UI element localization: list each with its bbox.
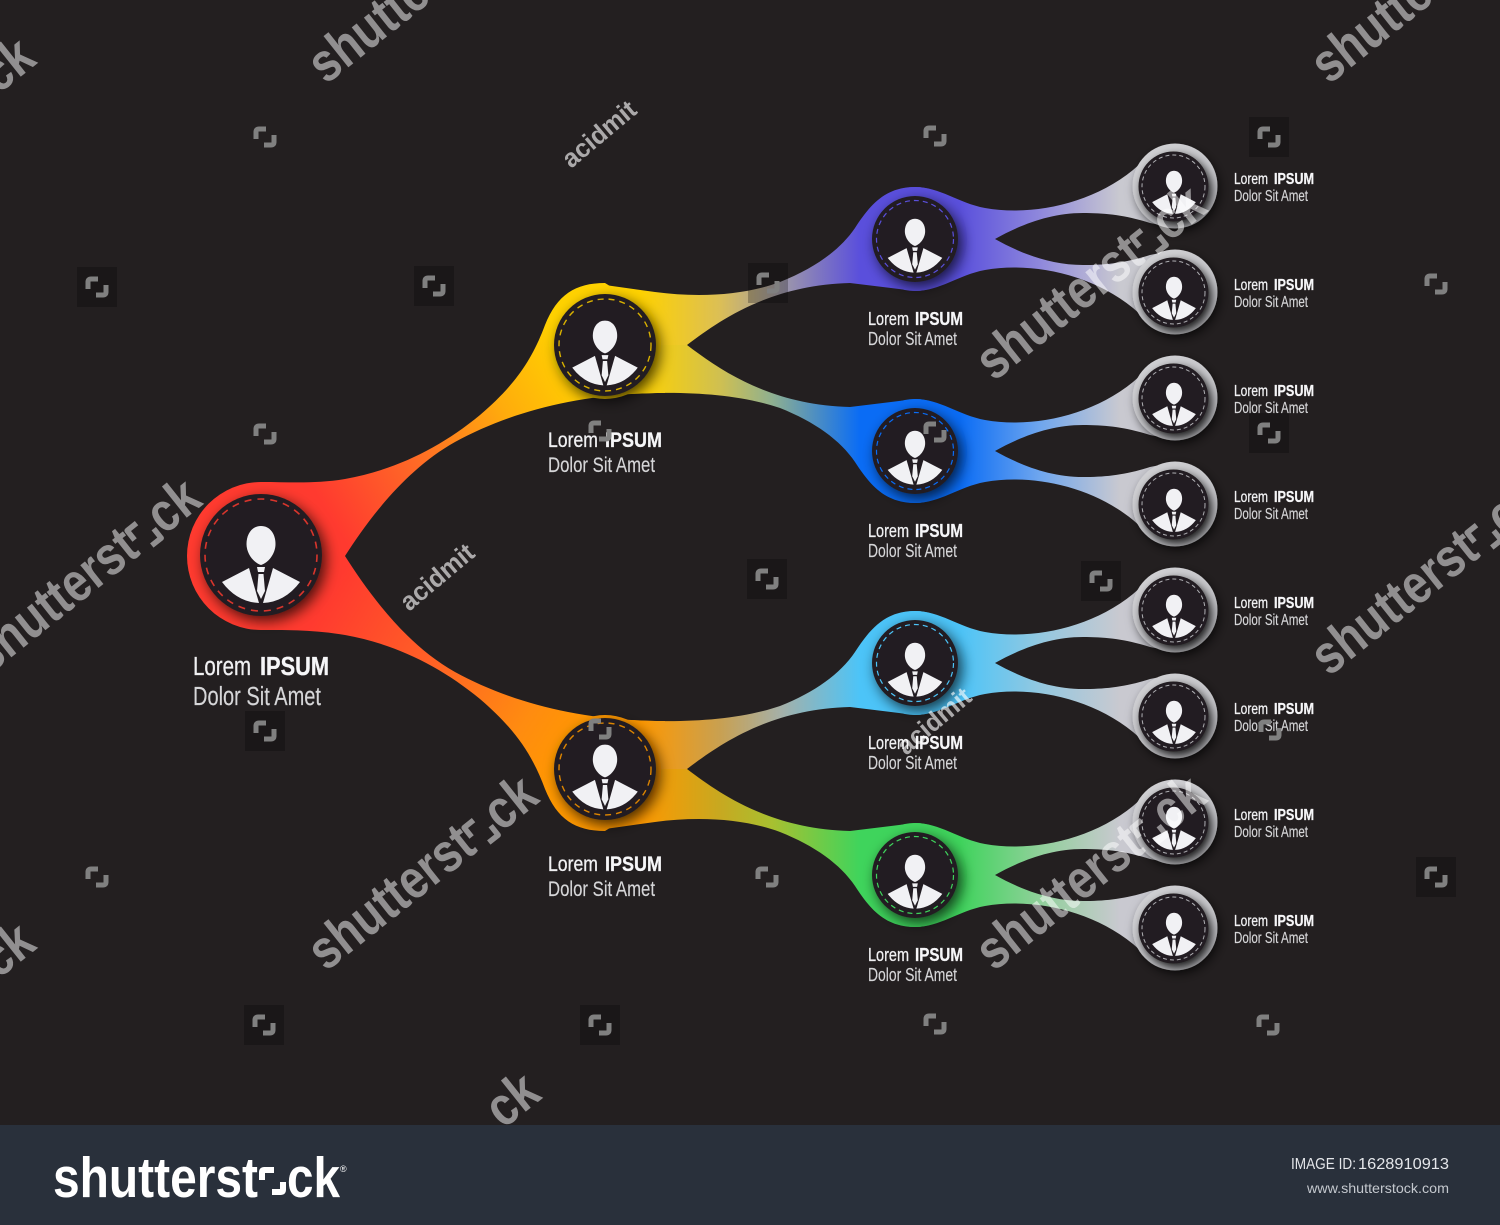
website: www.shutterstock.com	[1306, 1180, 1449, 1196]
leaf label 4: IPSUM	[1274, 489, 1314, 506]
watermark tile marks	[77, 117, 1456, 1045]
connector: purple to lower leaf	[915, 222, 1175, 334]
leaf label 4	[1234, 489, 1314, 523]
light blue label	[868, 732, 963, 773]
orange label	[548, 852, 662, 901]
purple blob	[863, 187, 967, 291]
leaf label 1	[1234, 171, 1314, 205]
watermark: shutterstock upper right: shutterst	[963, 221, 1154, 391]
connector: yellow to purple	[605, 187, 915, 345]
leaf label 2: Lorem	[1234, 277, 1268, 294]
green blob	[863, 823, 967, 927]
green label: Dolor Sit Amet	[868, 964, 957, 985]
connector: orange to light blue	[605, 611, 915, 769]
leaf node 4	[1132, 462, 1218, 546]
watermark: shutterstock lower right: shutterst	[963, 811, 1154, 981]
watermark: shutterstock lower middle: shutterst	[295, 811, 486, 981]
leaf label 5	[1234, 595, 1314, 629]
blue node	[872, 408, 958, 494]
image id: 1628910913	[1358, 1156, 1449, 1173]
yellow label: Lorem	[548, 428, 598, 452]
watermark: shutterstock left: ck	[133, 464, 212, 545]
root label: Lorem	[193, 653, 251, 681]
connector: light blue to upper leaf	[915, 568, 1175, 680]
connector: blue to lower leaf	[915, 434, 1175, 546]
leaf label 7	[1234, 807, 1314, 841]
light blue label: IPSUM	[915, 732, 963, 753]
leaf node 8	[1132, 886, 1218, 970]
leaf node 7	[1132, 780, 1218, 864]
connector: green to lower leaf	[915, 858, 1175, 970]
leaf label 8: Lorem	[1234, 913, 1268, 930]
connector: green to upper leaf	[915, 780, 1175, 892]
root label	[193, 653, 329, 711]
leaf label 1: Lorem	[1234, 171, 1268, 188]
green label: IPSUM	[915, 944, 963, 965]
connector: orange to green	[605, 769, 915, 927]
root label: IPSUM	[260, 653, 329, 681]
purple label: Lorem	[868, 308, 909, 329]
leaf label 6: Lorem	[1234, 701, 1268, 718]
leaf label 7: Dolor Sit Amet	[1234, 824, 1308, 841]
leaf node 3	[1132, 356, 1218, 440]
leaf node 1	[1132, 144, 1218, 228]
blue label	[868, 520, 963, 561]
footer logo: shutterst	[53, 1146, 258, 1210]
leaf label 8: Dolor Sit Amet	[1234, 930, 1308, 947]
leaf node 5	[1132, 568, 1218, 652]
leaf label 1: IPSUM	[1274, 171, 1314, 188]
orange label: Dolor Sit Amet	[548, 877, 655, 901]
yellow node	[554, 294, 656, 396]
leaf label 3: Dolor Sit Amet	[1234, 400, 1308, 417]
blue blob	[863, 399, 967, 503]
yellow blob	[549, 287, 661, 399]
connector: light blue to lower leaf	[915, 646, 1175, 758]
root red blob	[187, 482, 335, 630]
light blue node	[872, 620, 958, 706]
purple node	[872, 196, 958, 282]
watermark: acidmit lower: acidmit	[891, 681, 978, 761]
leaf label 2	[1234, 277, 1314, 311]
leaf label 5: Dolor Sit Amet	[1234, 612, 1308, 629]
leaf label 6	[1234, 701, 1314, 735]
leaf label 1: Dolor Sit Amet	[1234, 188, 1308, 205]
orange label: Lorem	[548, 852, 598, 876]
watermark: acidmit center: acidmit	[394, 537, 481, 617]
yellow label	[548, 428, 662, 477]
watermark: ck bottom: ck	[472, 1058, 551, 1139]
watermark: shutterstock lower right: ck	[1138, 761, 1217, 842]
leaf label 2: IPSUM	[1274, 277, 1314, 294]
connector: root to orange node	[261, 556, 665, 831]
green label	[868, 944, 963, 985]
root label: Dolor Sit Amet	[193, 683, 321, 711]
leaf label 8	[1234, 913, 1314, 947]
purple label: IPSUM	[915, 308, 963, 329]
purple label	[868, 308, 963, 349]
leaf label 7: Lorem	[1234, 807, 1268, 824]
image id	[1291, 1156, 1449, 1173]
orange node	[554, 718, 656, 820]
leaf node 6	[1132, 674, 1218, 758]
leaf label 4: Dolor Sit Amet	[1234, 506, 1308, 523]
footer logo: ®	[340, 1164, 347, 1174]
yellow label: IPSUM	[605, 428, 662, 452]
blue label: IPSUM	[915, 520, 963, 541]
purple label: Dolor Sit Amet	[868, 328, 957, 349]
blue label: Dolor Sit Amet	[868, 540, 957, 561]
leaf label 3: IPSUM	[1274, 383, 1314, 400]
root node with person icon	[200, 494, 322, 616]
light blue blob	[863, 611, 967, 715]
footer bar	[0, 1125, 1500, 1225]
watermark: shutterstock upper right: ck	[1138, 171, 1217, 252]
watermark: acidmit top: acidmit	[556, 94, 643, 174]
leaf label 5: IPSUM	[1274, 595, 1314, 612]
leaf label 6: IPSUM	[1274, 701, 1314, 718]
orange blob	[549, 715, 661, 827]
yellow label: Dolor Sit Amet	[548, 453, 655, 477]
tree diagram	[187, 144, 1218, 970]
leaf label 3	[1234, 383, 1314, 417]
leaf label 4: Lorem	[1234, 489, 1268, 506]
connector: root to yellow node	[261, 283, 665, 556]
blue label: Lorem	[868, 520, 909, 541]
connector: purple to upper leaf	[915, 144, 1175, 256]
leaf label 6: Dolor Sit Amet	[1234, 718, 1308, 735]
green node	[872, 832, 958, 918]
orange label: IPSUM	[605, 852, 662, 876]
leaf label 8: IPSUM	[1274, 913, 1314, 930]
light blue label: Lorem	[868, 732, 909, 753]
leaf label 5: Lorem	[1234, 595, 1268, 612]
connector: blue to upper leaf	[915, 356, 1175, 468]
connector: yellow to blue	[605, 345, 915, 503]
green label: Lorem	[868, 944, 909, 965]
leaf label 2: Dolor Sit Amet	[1234, 294, 1308, 311]
leaf label 7: IPSUM	[1274, 807, 1314, 824]
image id: IMAGE ID:	[1291, 1156, 1356, 1173]
light blue label: Dolor Sit Amet	[868, 752, 957, 773]
watermark: shutterstock lower middle: ck	[470, 761, 549, 842]
footer logo: ck	[287, 1146, 340, 1210]
leaf label 3: Lorem	[1234, 383, 1268, 400]
leaf node 2	[1132, 250, 1218, 334]
